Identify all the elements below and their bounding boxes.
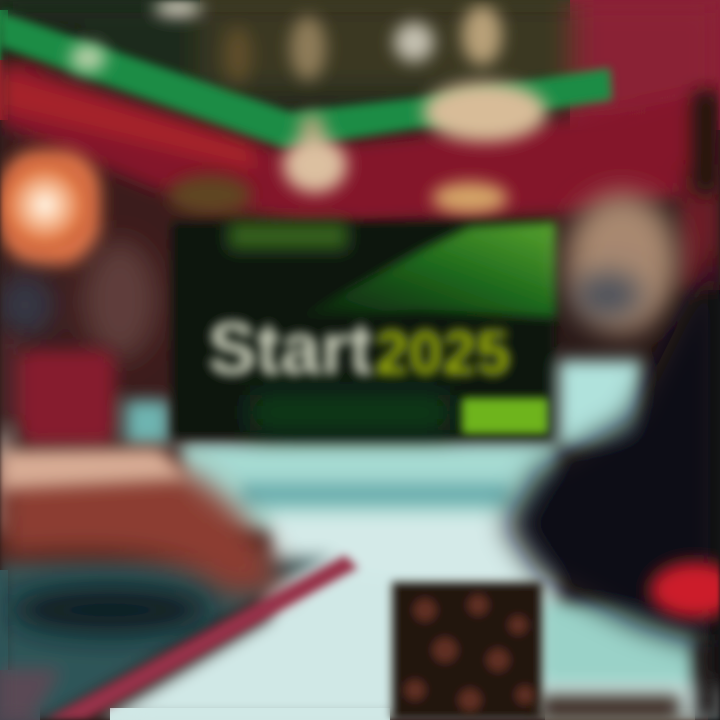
green ceiling stripe — [0, 12, 612, 148]
ceiling lamps — [70, 0, 547, 215]
screen lower green — [250, 395, 450, 430]
seated leg — [0, 465, 285, 595]
dark shadow under leg — [10, 586, 210, 634]
left figure — [0, 240, 158, 360]
red floor line — [45, 555, 358, 720]
maroon behind person — [680, 170, 720, 290]
hair — [692, 90, 720, 195]
screen green sweep — [295, 222, 556, 318]
screen button — [462, 398, 548, 434]
person on right — [505, 90, 720, 720]
maroon wall band — [0, 30, 720, 225]
screen title white: Start — [208, 307, 373, 390]
red patch — [650, 562, 720, 618]
teal floor — [0, 442, 720, 720]
light core — [0, 155, 95, 255]
screen — [172, 222, 556, 438]
glasses — [574, 273, 642, 317]
black jacket — [505, 250, 720, 650]
dark patterned box — [392, 582, 680, 720]
pale shirt — [558, 360, 643, 450]
box pattern — [404, 594, 535, 712]
face — [566, 192, 678, 332]
ceiling background — [0, 0, 720, 450]
glowing light on left — [0, 150, 100, 265]
screen title yellow: 2025 — [375, 319, 510, 388]
left figure torso — [0, 335, 170, 530]
leg highlight — [0, 448, 190, 490]
screen top label — [228, 222, 348, 250]
